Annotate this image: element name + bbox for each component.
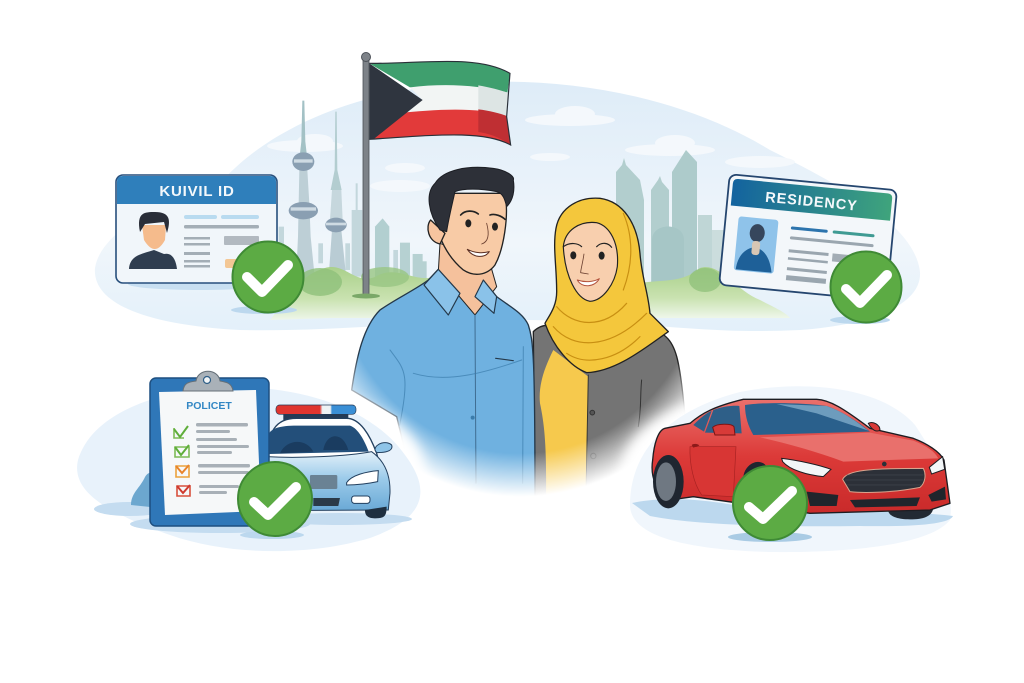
couple — [352, 167, 687, 500]
check badge: residency — [830, 252, 902, 324]
panel: Residency card — [719, 174, 897, 301]
woman — [533, 198, 687, 500]
card header with title: KUIVIL ID — [159, 183, 235, 200]
Kuwait flag — [369, 61, 511, 145]
ground shadow — [632, 499, 953, 526]
clouds — [267, 106, 795, 192]
panel: red car — [630, 386, 953, 552]
left skyline with Kuwait towers — [279, 101, 427, 282]
background sky blob — [95, 82, 920, 331]
check badge: ID — [231, 242, 304, 314]
red car — [652, 399, 950, 519]
clipboard title: POLICET — [186, 400, 232, 412]
residency portrait — [734, 216, 779, 274]
man — [352, 167, 535, 500]
police car — [267, 405, 392, 518]
ID portrait — [129, 212, 177, 269]
illustration: Kuwait residency documents and couple — [77, 52, 953, 552]
panel: police clearance — [77, 371, 420, 551]
bush — [131, 473, 160, 508]
check badge: police — [238, 462, 312, 539]
clipboard — [150, 371, 269, 526]
checklist — [174, 426, 190, 496]
white halos — [80, 384, 958, 554]
car blob background — [630, 386, 951, 552]
residency header with title: RESIDENCY — [765, 190, 858, 215]
residency text lines — [786, 226, 875, 288]
residency header with title — [731, 179, 893, 221]
blob background — [77, 387, 420, 551]
right skyline — [616, 150, 724, 285]
ground shadows — [94, 502, 412, 533]
green parkland — [270, 267, 790, 320]
ID text lines — [184, 215, 259, 268]
check badge: car — [728, 466, 812, 542]
card header with title — [117, 176, 276, 204]
panel: Kuwait ID card — [116, 175, 277, 290]
flag pole — [352, 52, 380, 298]
